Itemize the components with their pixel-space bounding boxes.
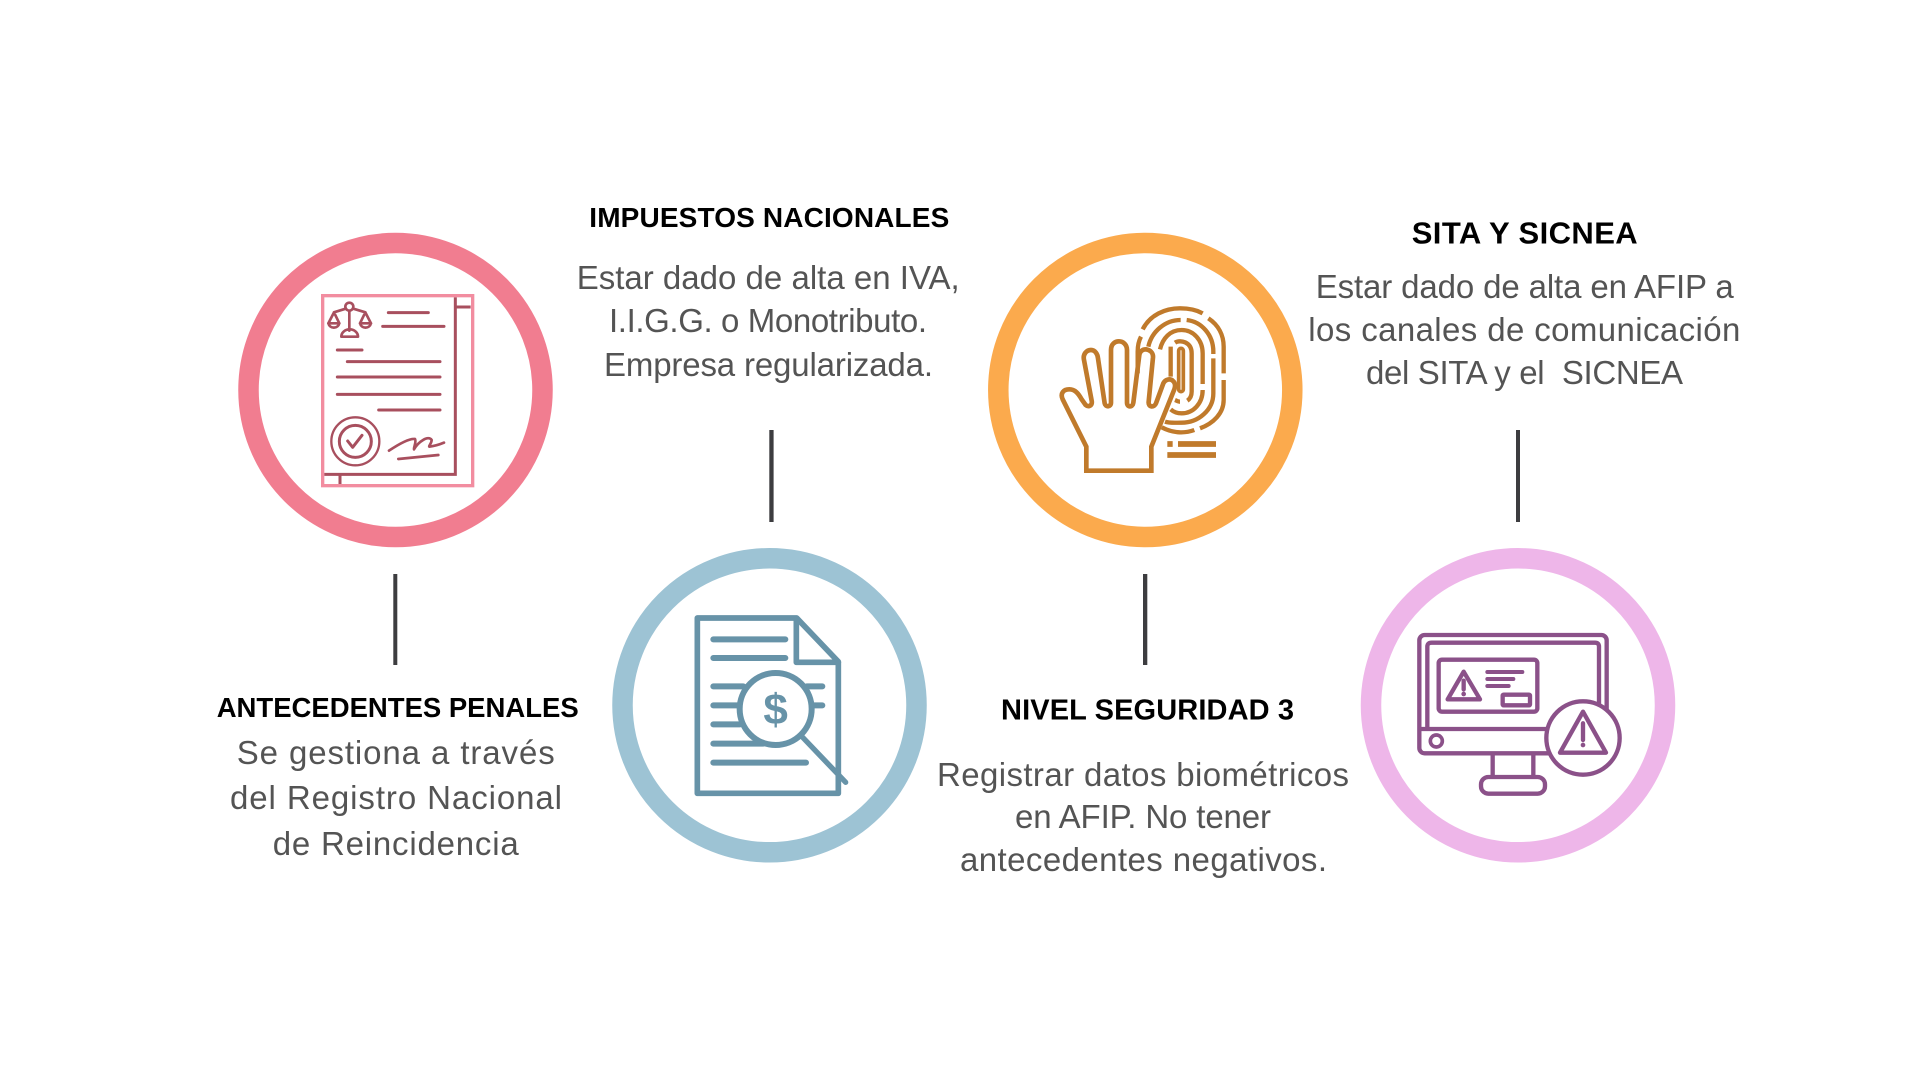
heading: nivel seguridad 3: NIVEL SEGURIDAD 3 (1001, 694, 1294, 726)
text block: antecedentes penales (230, 734, 562, 862)
text block: nivel seguridad 3: Registrar datos biométricos (937, 756, 1349, 793)
text block: impuestos nacionales: Empresa regularizada. (604, 346, 933, 383)
icon: hand and fingerprint (1062, 308, 1224, 471)
panel: antecedentes penales (217, 243, 579, 862)
text block: impuestos nacionales (577, 259, 960, 383)
heading: sita y sicnea: SITA Y SICNEA (1412, 216, 1638, 250)
heading: antecedentes penales: ANTECEDENTES PENALES (217, 692, 579, 723)
text block: sita y sicnea (1308, 268, 1740, 391)
text block: nivel seguridad 3: en AFIP. No tener (1015, 798, 1271, 835)
ring: lilac circle (1371, 558, 1665, 852)
connector line (1516, 430, 1520, 522)
text block: nivel seguridad 3 (937, 756, 1349, 878)
connector line (1143, 574, 1147, 665)
connector line (769, 430, 774, 522)
ring: orange circle (998, 243, 1292, 537)
text block: antecedentes penales: Se gestiona a través (237, 734, 555, 771)
icon: document with magnifier and dollar: $ (763, 686, 788, 735)
ring: pink circle (248, 243, 542, 537)
text block: sita y sicnea: del SITA y el SICNEA (1366, 354, 1683, 391)
heading: impuestos nacionales: IMPUESTOS NACIONALES (589, 202, 949, 233)
icon: document with magnifier and dollar (697, 618, 846, 793)
text block: sita y sicnea: Estar dado de alta en AFIP a (1316, 268, 1734, 305)
ring: blue circle (622, 558, 916, 852)
text block: antecedentes penales: de Reincidencia (273, 825, 519, 862)
panel: impuestos nacionales (577, 202, 960, 852)
text block: nivel seguridad 3: antecedentes negativos. (960, 841, 1327, 878)
panel: sita y sicnea (1308, 216, 1740, 852)
text block: sita y sicnea: los canales de comunicación (1308, 311, 1740, 348)
icon: legal document with scales and seal (323, 296, 473, 486)
text block: impuestos nacionales: I.I.G.G. o Monotributo. (609, 302, 927, 339)
text block: antecedentes penales: del Registro Nacional (230, 779, 562, 816)
panel: nivel seguridad 3 (937, 243, 1349, 878)
connector line (393, 574, 397, 665)
text block: impuestos nacionales: Estar dado de alta en IVA, (577, 259, 960, 296)
icon: monitor with warning (1419, 635, 1620, 794)
